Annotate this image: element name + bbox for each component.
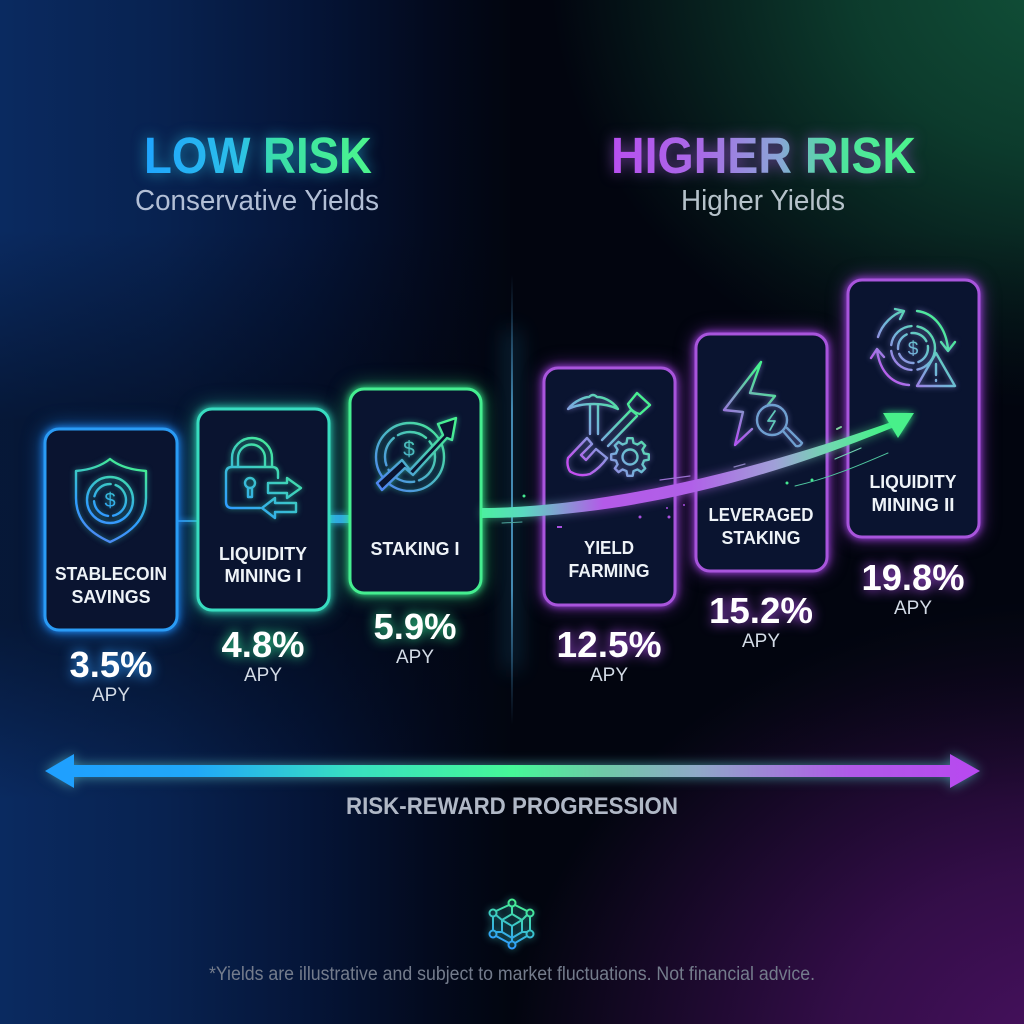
icon: cycle coin warning bbox=[871, 309, 955, 386]
yield unit: APY bbox=[894, 598, 932, 619]
yield unit: APY bbox=[742, 631, 780, 652]
yield value: 4.8% bbox=[222, 624, 304, 665]
yield unit: APY bbox=[92, 685, 130, 706]
yield value: 19.8% bbox=[862, 557, 964, 598]
icon: shield with coin: $ bbox=[104, 490, 116, 512]
higher risk subtitle: Higher Yields bbox=[681, 185, 845, 217]
card label: STAKING I bbox=[370, 539, 460, 559]
vertical divider bbox=[504, 275, 520, 725]
yield value: 3.5% bbox=[70, 644, 152, 685]
icon: shield with coin bbox=[76, 459, 146, 542]
arrow: rising yield curve bbox=[482, 413, 914, 528]
low risk title: LOW RISK bbox=[144, 127, 372, 184]
icon: pickaxe shovel gear bbox=[567, 393, 650, 476]
low risk subtitle: Conservative Yields bbox=[135, 185, 379, 217]
panel: liquidity mining II bbox=[848, 280, 979, 619]
yield value: 12.5% bbox=[556, 624, 662, 665]
card frame bbox=[45, 429, 177, 630]
panel: leveraged staking bbox=[696, 334, 827, 652]
icon: lightning with magnifier bbox=[724, 362, 802, 446]
connector: savings to liquidity bbox=[177, 520, 197, 522]
card label line 2: MINING I bbox=[224, 566, 302, 586]
arrow: risk-reward progression bbox=[45, 754, 980, 788]
card label: YIELD bbox=[584, 538, 634, 558]
heading: higher risk bbox=[611, 127, 916, 217]
card label: LEVERAGED bbox=[708, 505, 814, 525]
icon: coin with rising arrow: $ bbox=[403, 438, 415, 461]
icon: coin with rising arrow bbox=[376, 418, 456, 491]
panel: yield farming bbox=[544, 368, 675, 686]
card frame bbox=[350, 389, 481, 593]
card label: LIQUIDITY bbox=[870, 472, 956, 492]
panel: liquidity mining I bbox=[198, 409, 329, 686]
card frame bbox=[544, 368, 675, 605]
card label line 2: STAKING bbox=[722, 528, 800, 548]
icon: blockchain cube logo bbox=[490, 900, 534, 948]
card label line 2: MINING II bbox=[872, 495, 954, 515]
progression label: RISK-REWARD PROGRESSION bbox=[346, 793, 678, 820]
yield unit: APY bbox=[244, 665, 282, 686]
icon: cycle coin warning: $ bbox=[908, 339, 919, 360]
panel: stablecoin savings bbox=[45, 429, 177, 706]
card frame bbox=[848, 280, 979, 537]
higher risk title: HIGHER RISK bbox=[611, 127, 916, 184]
disclaimer: *Yields are illustrative and subject to market fluctuations. Not financial advice. bbox=[209, 964, 815, 985]
heading: low risk bbox=[135, 127, 379, 217]
card frame bbox=[198, 409, 329, 610]
yield unit: APY bbox=[590, 665, 628, 686]
icon: lock with arrows bbox=[226, 438, 301, 518]
yield unit: APY bbox=[396, 647, 434, 668]
panel: staking I bbox=[350, 389, 481, 668]
connector: liquidity to staking bbox=[330, 515, 349, 523]
card label line 2: SAVINGS bbox=[72, 587, 150, 607]
yield value: 5.9% bbox=[374, 606, 456, 647]
card label: LIQUIDITY bbox=[219, 544, 307, 564]
card label: STABLECOIN bbox=[55, 564, 167, 584]
card frame bbox=[696, 334, 827, 571]
card label line 2: FARMING bbox=[568, 561, 650, 581]
yield value: 15.2% bbox=[709, 590, 813, 631]
